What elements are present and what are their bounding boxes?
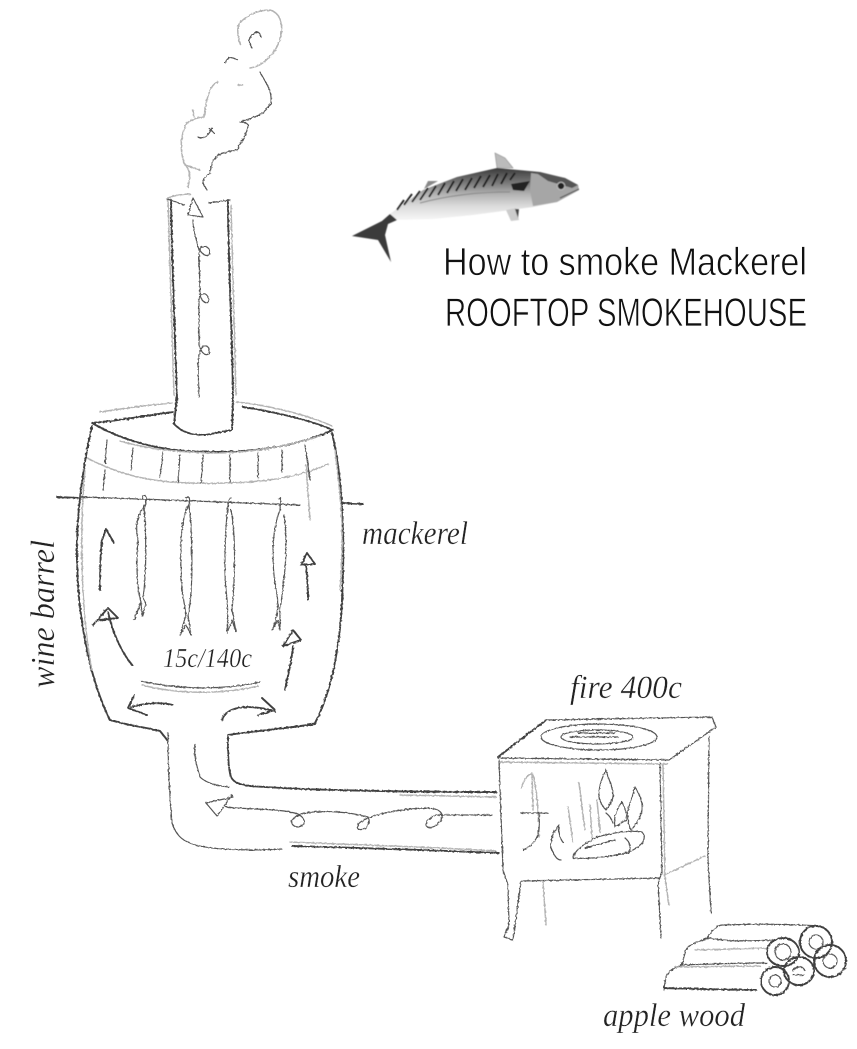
smoke squiggle arrow xyxy=(206,795,492,830)
chimney xyxy=(167,198,236,435)
icon: mackerel photo xyxy=(352,153,579,262)
fire stove xyxy=(498,717,716,940)
hanging rod xyxy=(57,497,363,505)
barrel rim and lid xyxy=(92,402,333,453)
barrel sides and base xyxy=(77,426,343,741)
wine barrel xyxy=(57,402,363,741)
label: smoke: smoke xyxy=(288,858,360,894)
smoke pipe xyxy=(168,733,499,853)
label: apple wood: apple wood xyxy=(603,998,745,1034)
label: fire temperature: fire 400c xyxy=(570,670,682,706)
label: temperature in barrel: 15c/140c xyxy=(163,643,252,673)
heat baffle xyxy=(141,681,260,692)
stove body and legs xyxy=(499,736,711,940)
convection arrows xyxy=(93,529,315,720)
title line: how to smoke mackerel: How to smoke Mackerel xyxy=(443,241,807,284)
title xyxy=(443,241,807,335)
smoke arrow rising in chimney xyxy=(188,198,210,397)
label: mackerel: mackerel xyxy=(362,516,468,552)
hanging mackerel xyxy=(134,495,286,635)
apple wood logs xyxy=(664,924,846,995)
stove top with hot plate xyxy=(498,717,716,764)
smoke plume xyxy=(168,10,282,198)
flames and logs in stove xyxy=(521,770,644,860)
label: wine barrel: wine barrel xyxy=(25,540,62,688)
barrel staves xyxy=(87,440,328,490)
